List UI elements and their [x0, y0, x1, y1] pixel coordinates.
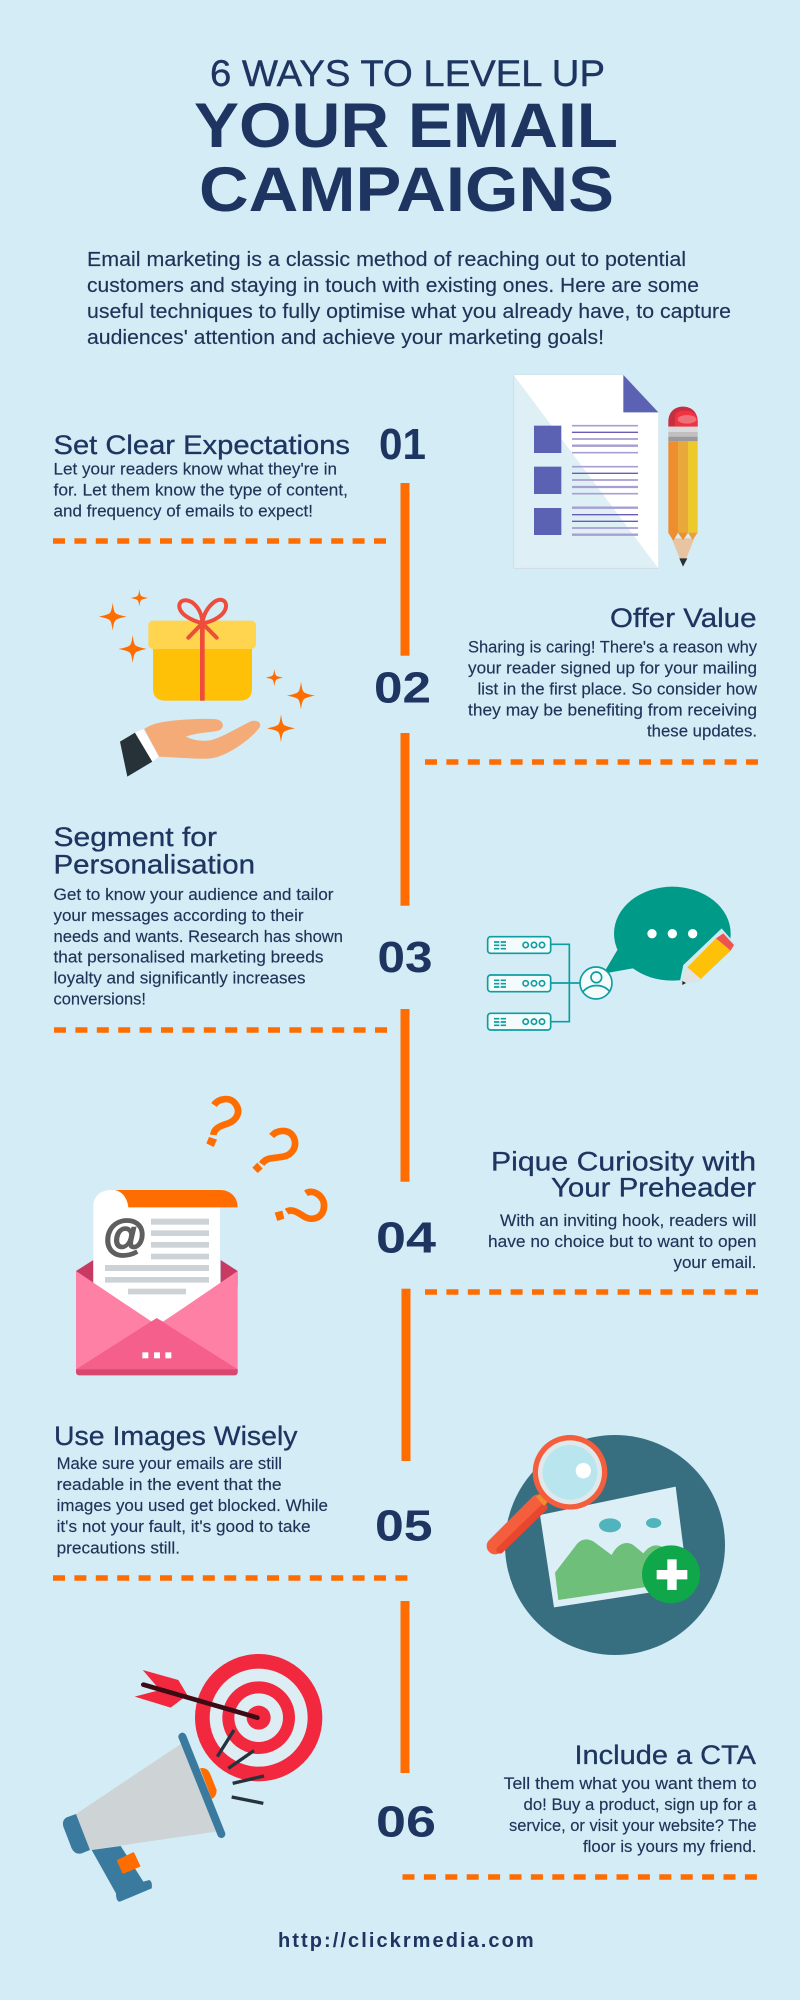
step 03 panel: [54, 822, 432, 1030]
step 03 body: Get to know your audience and tailor: [54, 886, 334, 904]
step 04 number: 04: [376, 1214, 437, 1263]
icon: gift on a hand: [99, 589, 315, 777]
step 03 number: 03: [378, 933, 432, 982]
step 04 body: your email.: [674, 1254, 756, 1272]
title: CAMPAIGNS: [199, 155, 614, 225]
pencil: [668, 407, 698, 567]
step 05 panel: [53, 1421, 433, 1578]
icon: magnifier over picture: [495, 1435, 725, 1655]
step 06 number: 06: [376, 1798, 436, 1847]
target: [195, 1654, 322, 1781]
step 04 heading: [491, 1147, 756, 1203]
step 06 body: service, or visit your website? The: [509, 1817, 756, 1835]
at sign: @: [104, 1211, 146, 1260]
intro text: audiences' attention and achieve your marketing goals!: [87, 327, 604, 349]
step 05 number: 05: [375, 1502, 433, 1551]
icon: envelope with letter: [76, 1099, 324, 1375]
question marks: [206, 1099, 324, 1221]
step 02 heading: Offer Value: [610, 603, 756, 633]
step 06 heading: Include a CTA: [574, 1740, 756, 1770]
title: YOUR EMAIL: [194, 91, 618, 161]
step 02 body: Sharing is caring! There's a reason why: [468, 638, 758, 656]
sound lines: [217, 1730, 264, 1803]
intro text: [87, 249, 731, 349]
step 05 body: [57, 1455, 328, 1557]
intro text: Email marketing is a classic method of reaching out to potential: [87, 249, 686, 271]
step 01 body: and frequency of emails to expect!: [54, 503, 313, 521]
step 03 heading: [54, 822, 255, 879]
step 05 body: images you used get blocked. While: [57, 1497, 328, 1515]
document sheet: [514, 375, 658, 568]
step 06 body: Tell them what you want them to: [504, 1775, 757, 1793]
step 04 body: have no choice but to want to open: [488, 1233, 756, 1251]
step 06 body: [504, 1775, 757, 1856]
icon: document and pencil: [514, 375, 698, 568]
pencil: [679, 928, 736, 985]
step 04 panel: [376, 1147, 759, 1292]
intro text: customers and staying in touch with existing ones. Here are some: [87, 275, 699, 297]
step 03 body: needs and wants. Research has shown: [54, 928, 343, 946]
icon: servers, user and chat bubble: [488, 887, 736, 1030]
picture: [540, 1487, 688, 1607]
step 02 number: 02: [374, 664, 431, 713]
step 02 body: list in the first place. So consider how: [478, 680, 757, 698]
step 01 body: Let your readers know what they're in: [54, 460, 337, 478]
step 01 body: for. Let them know the type of content,: [54, 482, 348, 500]
icon: target, arrow and megaphone: [63, 1654, 322, 1902]
step 02 body: these updates.: [647, 722, 757, 740]
gift box: [148, 600, 256, 701]
step 05 body: Make sure your emails are still: [57, 1455, 282, 1473]
step 04 body: With an inviting hook, readers will: [500, 1212, 756, 1230]
title: 6 WAYS TO LEVEL UP: [210, 53, 605, 94]
megaphone: [63, 1737, 221, 1902]
plus badge: [642, 1545, 700, 1603]
step 06 body: do! Buy a product, sign up for a: [524, 1796, 757, 1814]
step 03 heading: Personalisation: [54, 849, 255, 879]
footer url: http://clickrmedia.com: [278, 1930, 534, 1952]
server boxes: [488, 937, 551, 1030]
step 01 panel: [53, 420, 426, 541]
timeline: vertical orange segments: [400, 483, 410, 1773]
step 06 panel: [376, 1740, 758, 1877]
step 03 body: that personalised marketing breeds: [54, 948, 324, 966]
step 01 number: 01: [379, 420, 426, 469]
connector lines: [551, 944, 580, 1022]
arrow: [135, 1670, 257, 1718]
user circle: [580, 967, 612, 999]
step 03 body: loyalty and significantly increases: [54, 969, 306, 987]
intro text: useful techniques to fully optimise what you already have, to capture: [87, 301, 731, 323]
step 03 heading: Segment for: [54, 822, 217, 852]
step 01 body: [54, 460, 348, 521]
step 05 body: it's not your fault, it's good to take: [57, 1518, 311, 1536]
step 02 panel: [374, 603, 759, 762]
step 05 heading: Use Images Wisely: [54, 1421, 298, 1451]
step 06 body: floor is yours my friend.: [583, 1838, 756, 1856]
step 04 body: [488, 1212, 756, 1272]
sparkles: [99, 589, 315, 742]
hand: [120, 719, 260, 777]
step 04 heading: Your Preheader: [551, 1173, 756, 1203]
step 02 body: [468, 638, 758, 740]
step 05 body: readable in the event that the: [57, 1476, 282, 1494]
magnifying glass: [495, 1435, 607, 1550]
step 01 heading: Set Clear Expectations: [54, 430, 350, 460]
title: [194, 53, 618, 225]
step 03 body: your messages according to their: [54, 907, 304, 925]
step 02 body: they may be benefiting from receiving: [468, 701, 757, 719]
step 03 body: conversions!: [54, 990, 146, 1008]
step 04 heading: Pique Curiosity with: [491, 1147, 756, 1177]
step 03 body: [54, 886, 343, 1008]
step 02 body: your reader signed up for your mailing: [468, 659, 757, 677]
chat bubble: [603, 887, 731, 981]
step 05 body: precautions still.: [57, 1539, 180, 1557]
